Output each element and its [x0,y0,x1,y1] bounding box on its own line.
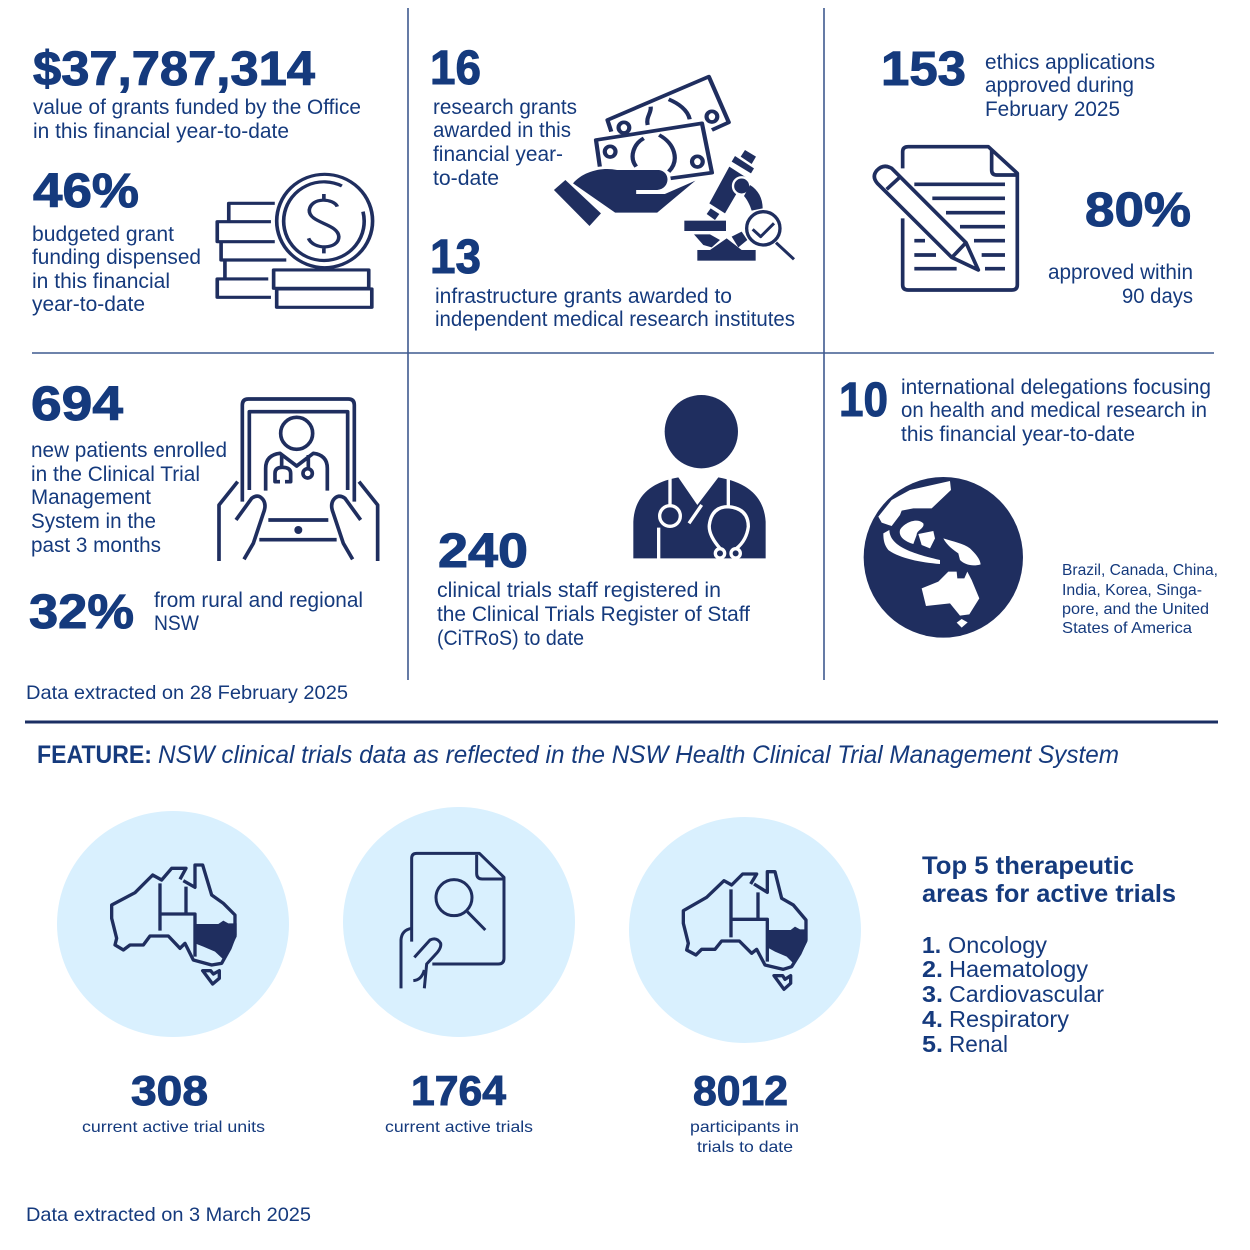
stat: 13: 13 [430,231,481,284]
label: participants in trials to date [690,1119,799,1156]
panel: active trials [343,807,575,1136]
ranked list: Haematology [949,956,1088,982]
icon: tablet with doctor [219,399,378,561]
text: list of countries: Brazil, Canada, China, [1062,562,1218,579]
heading: top 5 [922,852,1176,908]
panel: top 5 therapeutic areas [922,852,1176,1057]
icon: microscope with magnifier [684,150,794,261]
text: value of grants [33,95,361,143]
label: current active trial units: current active trial units [82,1119,265,1136]
stat: 80%: 80% [1085,184,1191,237]
text: infrastructure grants: infrastructure grants awarded to [435,284,732,308]
ranked list: Cardiovascular [949,981,1104,1007]
icon: doctor with stethoscope [633,395,766,559]
text: new patients: new patients enrolled [31,438,227,462]
stat: 16: 16 [430,42,481,95]
heading: feature: NSW clinical trials data as reflected in the NSW Health Clinical Trial Management System [158,741,1119,769]
text: approved within 90 days: approved within [1048,260,1193,284]
heading: top 5: Top 5 therapeutic [922,852,1134,880]
stat: 308: 308 [131,1067,208,1114]
icon: document with magnifier [401,853,504,988]
text: research grants [433,95,577,190]
text: approved within 90 days: 90 days [1122,284,1193,308]
heading: feature: FEATURE: [37,741,152,769]
text: list of countries: India, Korea, Singa- [1062,582,1202,599]
text: ethics applications approved: ethics applications [985,50,1155,74]
circle background [57,811,289,1037]
text: clinical trials staff: the Clinical Trials Register of Staff [437,602,750,626]
text: list of countries: States of America [1062,620,1192,637]
icon: Australia map with NSW [112,865,237,984]
heading: top 5: areas for active trials [922,880,1176,908]
panel: research and infrastructure grants [430,42,795,331]
stat: 694: 694 [31,378,123,431]
text: international delegations [901,375,1211,446]
icon: globe [864,477,1023,638]
text: budgeted grant funding: funding dispensed [32,245,201,269]
text: from rural and regional NSW: NSW [154,611,200,635]
text: new patients: past 3 months [31,533,161,557]
text: new patients: System in the [31,509,156,533]
stat: 240: 240 [438,525,528,578]
circle background [343,807,575,1037]
stat: 46%: 46% [33,165,139,218]
text: approved within 90 days [1048,260,1193,308]
ranked list [922,932,1104,1057]
text: international delegations: international delegations focusing [901,375,1211,399]
ranked list: Oncology [948,932,1048,958]
text: infrastructure grants [435,284,795,331]
text: value of grants: value of grants funded by the Office [33,95,361,119]
ranked list: 3. [922,981,943,1007]
text: research grants: financial year- [433,142,563,166]
data extraction note: 28 February 2025: Data extracted on 28 February 2025 [26,682,348,704]
text: research grants: research grants [433,95,577,119]
icon: document and pencil [874,147,1017,290]
text: research grants: awarded in this [433,118,571,142]
text: list of countries: pore, and the United [1062,601,1209,618]
text: ethics applications approved [985,50,1155,121]
text: list of countries [1062,562,1218,637]
text: clinical trials staff: clinical trials staff registered in [437,578,721,602]
stat: 153: 153 [881,43,966,96]
icon: hand holding money [554,77,729,226]
text: ethics applications approved: approved during [985,73,1134,97]
panel: grants funded [32,43,373,316]
stat: 1764: 1764 [411,1067,507,1114]
panel: clinical trials staff [437,395,766,650]
text: from rural and regional NSW: from rural and regional [154,588,363,612]
text: international delegations: this financial year-to-date [901,422,1135,446]
text: ethics applications approved: February 2025 [985,97,1120,121]
text: budgeted grant funding: in this financial [32,269,170,293]
circle background [629,817,861,1043]
ranked list: 4. [922,1006,943,1032]
panel: participants [629,817,861,1156]
label: participants in trials to date: trials to date [697,1139,793,1156]
text: value of grants: in this financial year-to-date [33,119,289,143]
label: current active trials: current active trials [385,1119,533,1136]
stat: 8012: 8012 [693,1067,788,1114]
ranked list: Respiratory [949,1006,1069,1032]
panel: ethics applications [874,43,1193,308]
label: participants in trials to date: participants in [690,1119,799,1136]
text: budgeted grant funding [32,222,201,316]
ranked list: 5. [922,1031,943,1057]
ranked list: Renal [949,1031,1008,1057]
ranked list: 1. [922,932,941,958]
stat: 10: 10 [839,374,888,427]
text: budgeted grant funding: budgeted grant [32,222,174,246]
text: international delegations: on health and medical research in [901,398,1207,422]
text: clinical trials staff: (CiTRoS) to date [437,626,584,650]
text: research grants: to-date [433,166,499,190]
panel: new patients enrolled [29,378,378,639]
text: clinical trials staff [437,578,750,650]
icon: coin stack [217,174,373,307]
text: budgeted grant funding: year-to-date [32,292,145,316]
panel: international delegations [839,374,1218,638]
ranked list: 2. [922,956,943,982]
stat: $37,787,314: $37,787,314 [33,43,315,96]
panel: active trial units [57,811,289,1136]
text: new patients [31,438,227,557]
icon: Australia map with NSW [683,872,807,989]
text: new patients: in the Clinical Trial [31,462,200,486]
text: new patients: Management [31,485,151,509]
data extraction note: 3 March 2025: Data extracted on 3 March 2025 [26,1204,311,1226]
stat: 32%: 32% [29,586,134,639]
text: from rural and regional NSW [154,588,363,635]
text: infrastructure grants: independent medical research institutes [435,307,795,331]
